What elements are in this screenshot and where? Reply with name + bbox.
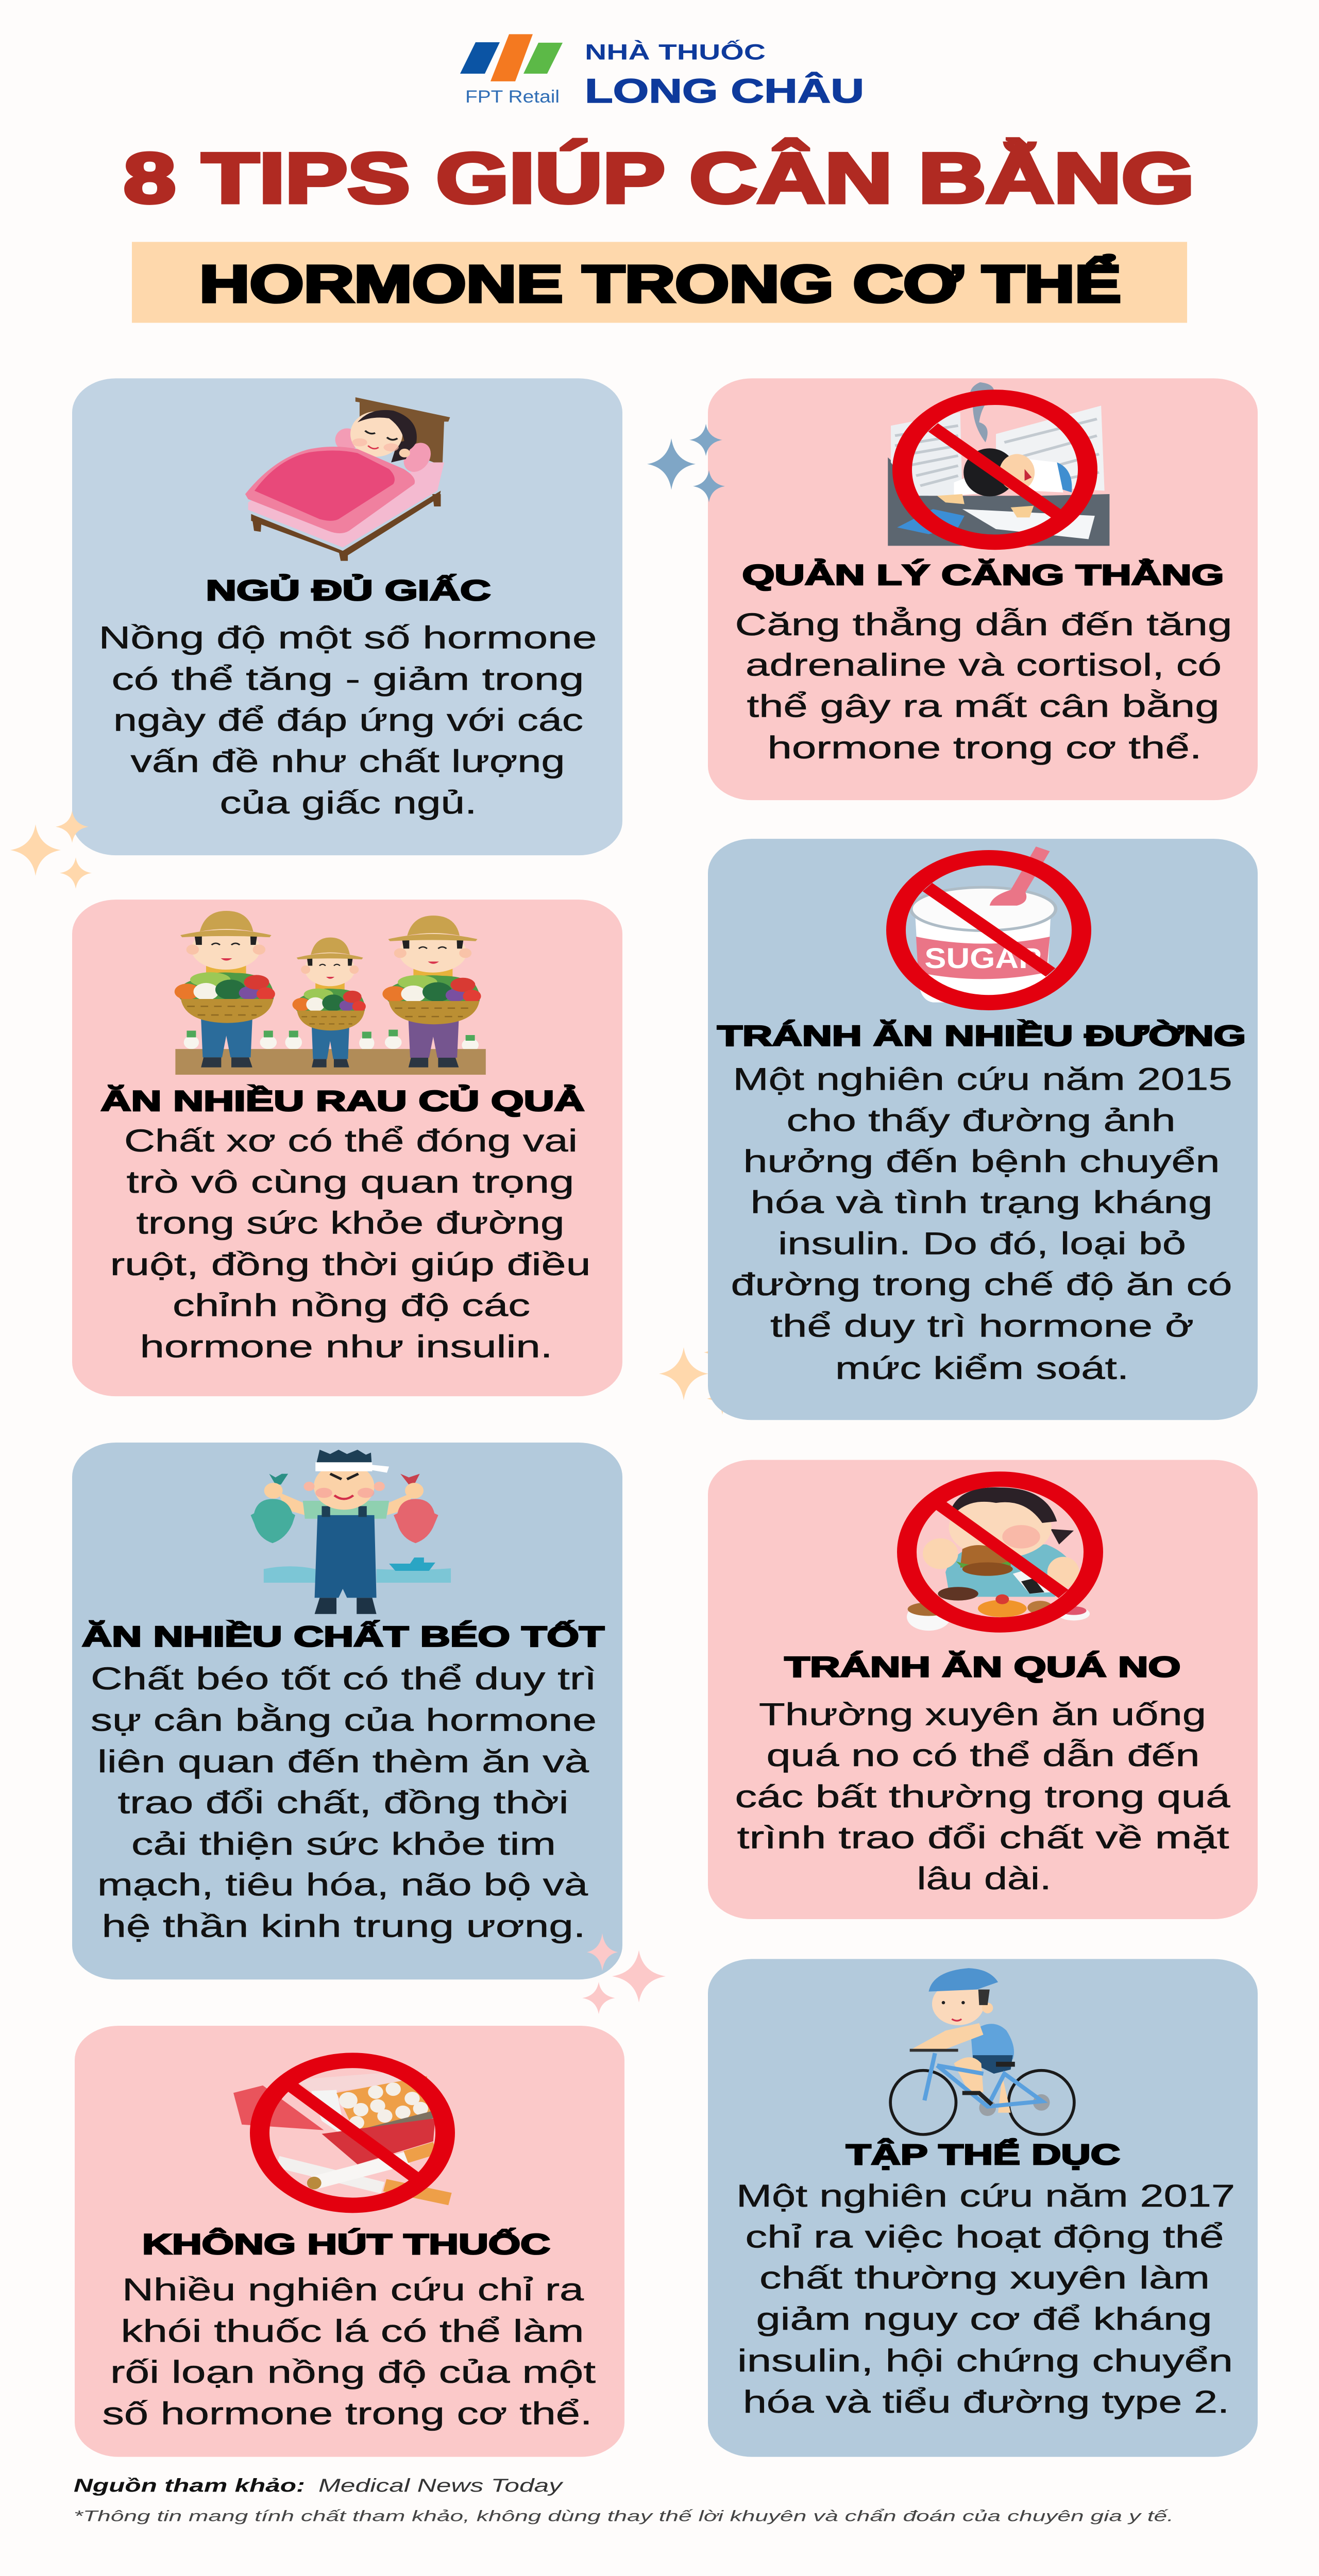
- body text: thể duy trì hormone ở: [770, 1309, 1194, 1344]
- body text: Nhiều nghiên cứu chỉ ra: [122, 2272, 584, 2307]
- body text: hóa và tình trạng kháng: [750, 1185, 1212, 1220]
- illustration: farmers with vegetable baskets: [175, 911, 486, 1075]
- panel: tránh ăn quá no: [708, 1460, 1258, 1919]
- body text: vấn đề như chất lượng: [131, 744, 565, 778]
- panel: không hút thuốc: [75, 2026, 624, 2457]
- heading: KHÔNG HÚT THUỐC: [142, 2228, 550, 2260]
- body text: cho thấy đường ảnh: [786, 1103, 1175, 1138]
- subtitle banner: [132, 242, 1187, 323]
- decorative sparkle: blue cluster: [647, 424, 725, 502]
- body text: có thể tăng - giảm trong: [112, 662, 584, 697]
- body text: Một nghiên cứu năm 2015: [733, 1062, 1232, 1097]
- body text: trò vô cùng quan trọng: [127, 1164, 574, 1199]
- icon: FPT tri-colour mark: [460, 34, 563, 81]
- body text: ruột, đồng thời giúp điều: [110, 1247, 590, 1282]
- body text: Thường xuyên ăn uống: [759, 1697, 1206, 1732]
- heading: ĂN NHIỀU CHẤT BÉO TỐT: [82, 1621, 604, 1653]
- body text: của giấc ngủ.: [219, 785, 477, 820]
- body text: quá no có thể dẫn đến: [766, 1738, 1199, 1773]
- heading: TRÁNH ĂN QUÁ NO: [785, 1651, 1181, 1683]
- brand name line 2: LONG CHÂU: [585, 72, 864, 110]
- body text: hệ thần kinh trung ương.: [102, 1909, 585, 1943]
- body text: mạch, tiêu hóa, não bộ và: [97, 1867, 588, 1902]
- title: 8 TIPS GIÚP CÂN BẰNG: [124, 139, 1194, 218]
- body text: thể gây ra mất cân bằng: [747, 689, 1219, 723]
- body text: lâu dài.: [917, 1861, 1051, 1896]
- illustration: sugar cup with prohibition sign: SUGAR: [924, 943, 1042, 974]
- body text: mức kiểm soát.: [835, 1351, 1129, 1386]
- heading: TẬP THỂ DỤC: [846, 2139, 1120, 2171]
- source note: Nguồn tham khảo:: [74, 2476, 305, 2496]
- disclaimer: *Thông tin mang tính chất tham khảo, không dùng thay thế lời khuyên và chẩn đoán của chuyên gia y tế.: [74, 2508, 1174, 2525]
- body text: ngày để đáp ứng với các: [113, 703, 583, 738]
- panel: ngủ đủ giấc: [72, 378, 622, 855]
- body text: cải thiện sức khỏe tim: [131, 1826, 556, 1861]
- body text: hormone như insulin.: [140, 1329, 552, 1364]
- source note: [74, 2476, 564, 2496]
- body text: liên quan đến thèm ăn và: [97, 1744, 589, 1779]
- body text: [99, 620, 597, 820]
- body text: số hormone trong cơ thể.: [102, 2396, 592, 2431]
- body text: insulin. Do đó, loại bỏ: [778, 1226, 1186, 1261]
- subtitle banner: HORMONE TRONG CƠ THỂ: [199, 255, 1121, 313]
- body text: đường trong chế độ ăn có: [731, 1267, 1232, 1302]
- body text: khói thuốc lá có thể làm: [121, 2313, 584, 2348]
- heading: TRÁNH ĂN NHIỀU ĐƯỜNG: [717, 1020, 1246, 1052]
- heading: ĂN NHIỀU RAU CỦ QUẢ: [100, 1086, 584, 1117]
- panel: tập thể dục: [708, 1959, 1258, 2457]
- body text: [731, 1062, 1232, 1386]
- body text: [735, 606, 1232, 765]
- panel: ăn nhiều chất béo tốt: [72, 1443, 622, 1979]
- illustration: sleeping in bed: [245, 397, 450, 561]
- illustration: overeating child with prohibition sign: [907, 1479, 1093, 1631]
- decorative sparkle: orange by first card: [10, 810, 92, 889]
- brand caption: FPT Retail: [465, 87, 560, 107]
- body text: chất thường xuyên làm: [759, 2260, 1210, 2295]
- body text: Chất xơ có thể đóng vai: [124, 1123, 578, 1158]
- illustration: sugar cup with prohibition sign: [896, 846, 1081, 1003]
- body text: giảm nguy cơ để kháng: [756, 2301, 1212, 2336]
- panel: quản lý căng thẳng: [708, 378, 1258, 800]
- source note: Medical News Today: [318, 2476, 564, 2496]
- body text: chỉnh nồng độ các: [173, 1288, 530, 1323]
- body text: hormone trong cơ thể.: [768, 730, 1202, 765]
- logo: FPT Retail Nhà thuốc Long Châu: [460, 34, 864, 110]
- body text: sự cân bằng của hormone: [91, 1703, 597, 1737]
- body text: adrenaline và cortisol, có: [746, 648, 1222, 683]
- body text: trong sức khỏe đường: [137, 1206, 565, 1241]
- body text: [91, 1661, 597, 1943]
- decorative sparkle: pink cluster: [582, 1933, 666, 2014]
- panel: tránh ăn nhiều đường: [708, 839, 1258, 1420]
- illustration: cyclist: [890, 1968, 1074, 2134]
- illustration: stressed office worker with prohibition sign: [888, 382, 1109, 546]
- body text: Một nghiên cứu năm 2017: [736, 2178, 1235, 2213]
- body text: Căng thẳng dẫn đến tăng: [735, 606, 1232, 642]
- body text: Chất béo tốt có thể duy trì: [91, 1661, 597, 1696]
- panel: ăn nhiều rau củ quả: [72, 900, 622, 1396]
- body text: rối loạn nồng độ của một: [110, 2354, 596, 2389]
- body text: các bất thường trong quá: [735, 1779, 1230, 1814]
- body text: Nồng độ một số hormone: [99, 620, 597, 655]
- body text: trao đổi chất, đồng thời: [118, 1785, 569, 1820]
- body text: chỉ ra việc hoạt động thể: [745, 2219, 1224, 2255]
- body text: [110, 1123, 590, 1364]
- brand name line 1: NHÀ THUỐC: [585, 40, 766, 64]
- decorative sparkle: orange behind sugar card: [659, 1336, 738, 1415]
- heading: QUẢN LÝ CĂNG THẲNG: [742, 560, 1224, 591]
- body text: [102, 2272, 596, 2431]
- body text: hóa và tiểu đường type 2.: [743, 2384, 1229, 2419]
- heading: NGỦ ĐỦ GIẤC: [206, 574, 491, 606]
- body text: [736, 2178, 1235, 2419]
- illustration: cigarette pack with prohibition sign: [233, 2060, 450, 2205]
- body text: insulin, hội chứng chuyển: [737, 2343, 1233, 2378]
- illustration: fisherman holding two fish: [251, 1450, 451, 1614]
- body text: hưởng đến bệnh chuyển: [743, 1144, 1220, 1179]
- body text: trình trao đổi chất về mặt: [737, 1820, 1229, 1855]
- body text: [735, 1697, 1230, 1896]
